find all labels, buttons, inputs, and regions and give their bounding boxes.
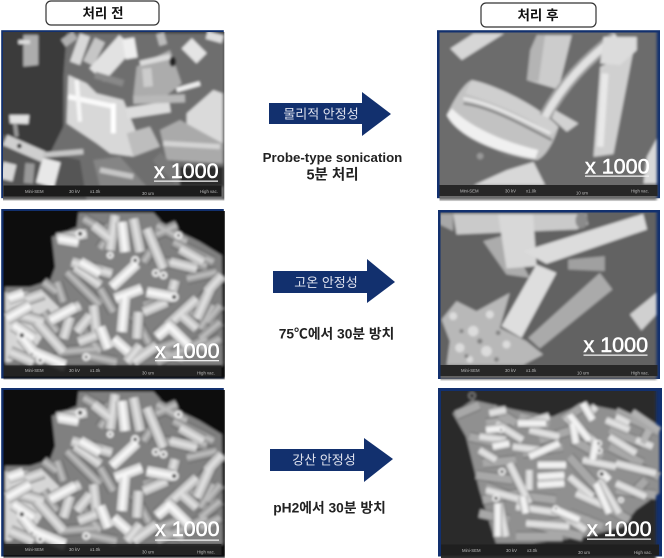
info bar: 30 kV: [505, 188, 516, 194]
heading: before treatment: [46, 1, 159, 25]
info bar: 30 um: [142, 550, 154, 554]
info bar: x1.0k: [90, 189, 101, 194]
caption: probe-type sonication: [263, 150, 402, 184]
arrow: strong acid stability: [270, 438, 393, 482]
info bar: [440, 365, 658, 376]
info bar: x1.0k: [526, 188, 537, 194]
info bar: High vac.: [197, 370, 215, 376]
info bar: 10 um: [576, 190, 588, 196]
info bar: High vac.: [200, 189, 218, 194]
info bar: [4, 366, 222, 376]
info bar: 10 um: [577, 370, 589, 376]
magnification label: x 1000: [155, 517, 220, 541]
info bar: 30 um: [142, 370, 154, 376]
info bar: 30 kV: [69, 189, 80, 194]
panel: after treatment, physical stability SEM image: [430, 29, 660, 200]
info bar: High vac.: [631, 370, 649, 376]
info bar: Mini-SEM: [25, 368, 44, 373]
info bar: [4, 544, 222, 555]
info bar: 30 um: [142, 191, 154, 196]
magnification label: x 1000: [155, 339, 220, 363]
magnification label: x 1000: [584, 333, 648, 357]
info bar: x1.0k: [90, 547, 101, 552]
info bar: [4, 186, 222, 196]
info bar: [441, 544, 659, 556]
info bar: x3.0k: [527, 548, 538, 553]
info bar: High vac.: [197, 550, 215, 554]
info bar: Mini-SEM: [461, 368, 480, 373]
panel: before treatment, acid stability SEM image: [0, 384, 227, 558]
info bar: Mini-SEM: [460, 188, 479, 194]
info bar: 30 kV: [69, 368, 80, 373]
panel: after treatment, high temperature SEM image: [430, 208, 660, 379]
info bar: x1.0k: [90, 368, 101, 373]
arrow: physical stability: 물리적 안정성: [283, 106, 359, 122]
info bar: 30 kV: [505, 368, 516, 373]
info bar: High vac.: [631, 188, 649, 194]
caption: 75 degrees for 30 minutes: 75℃에서 30분 방치: [279, 326, 394, 342]
info bar: [440, 185, 658, 196]
info bar: High vac.: [634, 550, 652, 555]
arrow: high temperature stability: [273, 259, 395, 303]
caption: probe-type sonication: Probe-type sonication: [263, 150, 402, 165]
magnification label: x 1000: [585, 154, 650, 178]
info bar: 30 um: [578, 550, 590, 555]
info bar: Mini-SEM: [25, 547, 44, 552]
heading: after treatment: [481, 3, 596, 27]
arrow: strong acid stability: 강산 안정성: [292, 452, 356, 468]
heading: after treatment: 처리 후: [517, 8, 559, 23]
panel: before treatment, physical stability SEM image: [0, 28, 227, 200]
caption: probe-type sonication: 5분 처리: [306, 166, 359, 184]
panel: after treatment, acid stability SEM image: [429, 387, 662, 558]
arrow: physical stability: [269, 92, 391, 136]
info bar: 30 kV: [69, 547, 80, 552]
heading: before treatment: 처리 전: [82, 6, 124, 21]
panel: before treatment, high temperature SEM image: [0, 205, 227, 379]
info bar: Mini-SEM: [462, 548, 481, 553]
info bar: x1.0k: [526, 368, 537, 373]
caption: pH2 for 30 minutes: pH2에서 30분 방치: [273, 500, 386, 516]
info bar: Mini-SEM: [25, 189, 44, 194]
magnification label: x 1000: [587, 517, 652, 541]
magnification label: x 1000: [154, 159, 219, 183]
arrow: high temperature stability: 고온 안정성: [294, 275, 358, 290]
info bar: 30 kV: [506, 548, 517, 553]
